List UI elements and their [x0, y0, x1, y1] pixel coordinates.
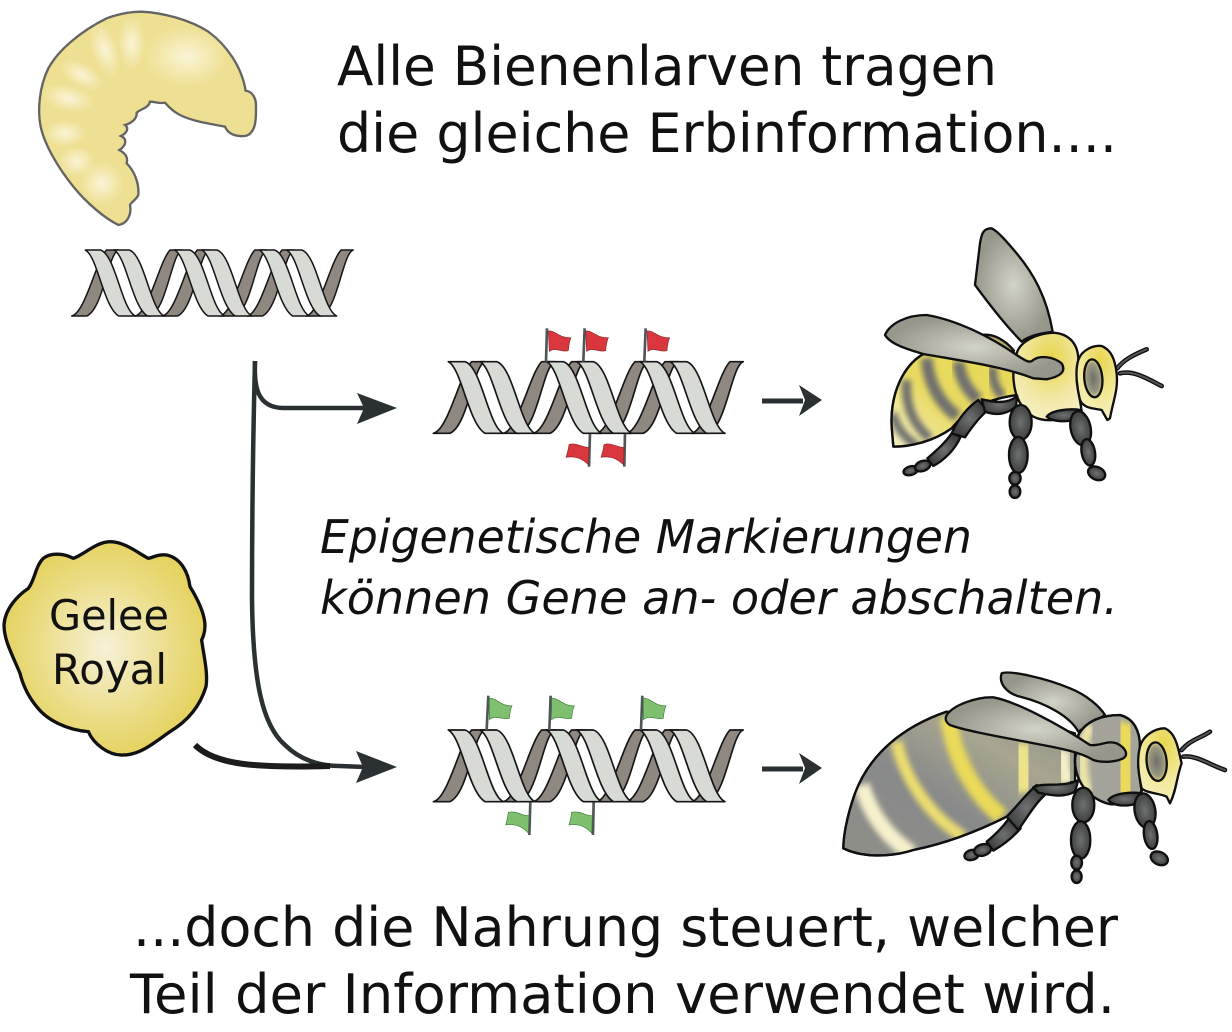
lower wing [946, 697, 1126, 762]
antennae [1182, 732, 1225, 770]
icon: green-flagged DNA [433, 696, 743, 835]
icon: Gelee Royal blob: Royal [52, 645, 167, 694]
head [1076, 346, 1117, 420]
icon: Gelee Royal blob: Gelee [49, 591, 169, 640]
icon: larva DNA helix [72, 250, 353, 316]
legs [902, 396, 1107, 498]
text: epigenetic marks: können Gene an- oder abschalten. [320, 571, 1118, 625]
text: epigenetic marks [320, 510, 1118, 625]
text: bottom conclusion: ...doch die Nahrung steuert, welcher [133, 896, 1119, 959]
thorax [1013, 333, 1082, 420]
arrow: Gelee Royal feed [195, 745, 330, 767]
arrow: lower branch from vertical line [252, 361, 397, 783]
antennae [1117, 349, 1162, 386]
arrow: to queen bee [762, 753, 822, 784]
eye [1145, 742, 1168, 782]
arrow: to worker bee [762, 385, 822, 416]
text: epigenetic marks: Epigenetische Markierungen [320, 510, 972, 564]
small rear wing [982, 335, 1014, 353]
abdomen [843, 712, 1075, 855]
thorax [1075, 715, 1142, 804]
text: bottom conclusion [129, 896, 1119, 1026]
legs [963, 780, 1170, 883]
heading: top text: die gleiche Erbinformation.... [337, 102, 1117, 165]
heading: top text [337, 35, 1117, 165]
icon: larva [39, 12, 256, 225]
head [1138, 728, 1182, 803]
upper wing [1001, 673, 1105, 732]
arrow: upper branch [255, 361, 397, 424]
eye [1083, 359, 1104, 398]
heading: top text: Alle Bienenlarven tragen [337, 35, 997, 98]
upper wing [975, 228, 1053, 342]
icon: queen bee [843, 673, 1225, 883]
icon: red-flagged DNA [433, 328, 743, 467]
icon: Gelee Royal blob [4, 542, 207, 755]
text: bottom conclusion: Teil der Information verwendet wird. [129, 963, 1115, 1026]
abdomen [890, 349, 1016, 448]
lower wing [885, 315, 1063, 379]
icon: worker bee [885, 228, 1162, 498]
